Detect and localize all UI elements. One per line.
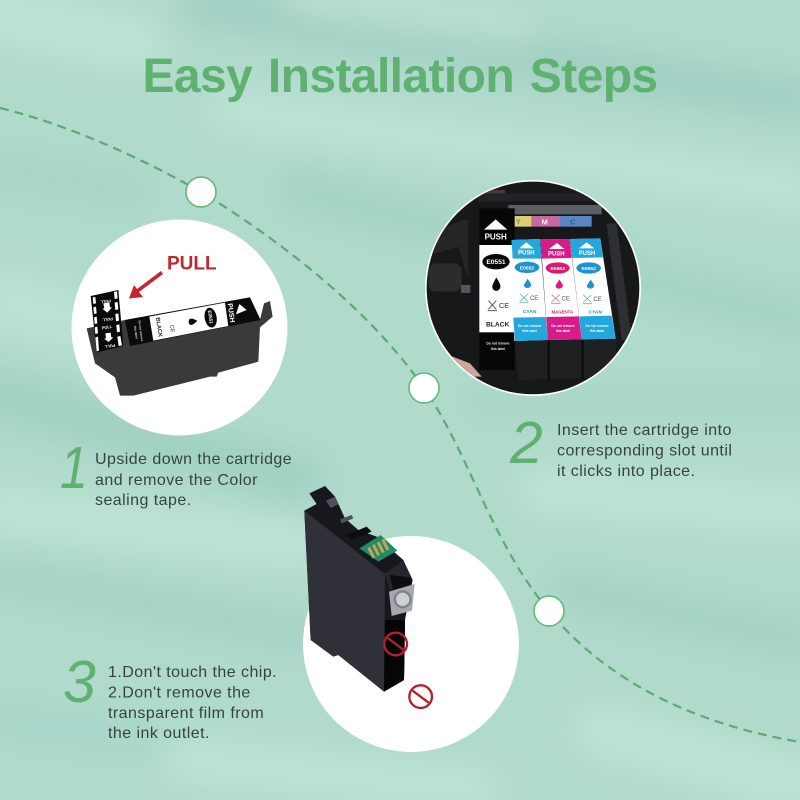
step 3 text: 1.Don't touch the chip.	[108, 664, 277, 681]
cartridge: pull tape: BLACK	[154, 317, 163, 338]
cartridge: pull tape: PULL	[100, 298, 111, 305]
cartridge: cyan right: this label	[590, 329, 604, 333]
cartridge: black: Do not remove	[486, 341, 510, 345]
cartridge: cyan right: CYAN	[588, 310, 603, 316]
cartridge: pull tape: this label	[133, 326, 139, 339]
cartridge: magenta: CE	[562, 297, 570, 303]
step 3 text: the ink outlet.	[108, 725, 210, 742]
cartridge: pull tape: PULL	[101, 324, 113, 330]
step 1 text: and remove the Color	[95, 472, 258, 489]
cartridge: black	[479, 208, 515, 370]
step 1 text: Upside down the cartridge	[95, 451, 292, 468]
dashed path	[0, 108, 800, 742]
prohibition icon: film	[409, 685, 432, 708]
cartridge: pull tape: Do not remove	[137, 320, 144, 342]
panel: step 1 photo	[72, 220, 288, 436]
cartridge: cyan: PUSH	[518, 251, 535, 257]
cartridge: pull tape: E0551	[207, 310, 214, 325]
cartridge: cyan right: Do not remove	[585, 324, 609, 328]
cartridge: magenta	[541, 239, 582, 340]
step 2 text	[557, 422, 732, 480]
arrow: pull	[129, 271, 163, 298]
step 1 number: 1	[60, 434, 88, 501]
panel: step 2 photo: Y	[516, 217, 521, 226]
cartridge: magenta: this label	[556, 329, 570, 333]
panel: step 2 photo	[425, 180, 641, 396]
cartridge: cyan right: E0552	[581, 266, 596, 272]
step 3 text: transparent film from	[108, 705, 264, 722]
ink outlet film	[389, 584, 415, 616]
cartridge: cyan right: CE	[593, 297, 602, 303]
cartridge: pull tape: CE	[168, 324, 175, 333]
node 2	[409, 373, 439, 403]
cartridge: magenta: MAGENTA	[552, 309, 574, 314]
cartridge: magenta: PUSH	[548, 251, 565, 257]
panel: step 2 photo: C	[570, 217, 576, 226]
cartridge: cyan right: PUSH	[579, 251, 595, 257]
step 3 text: 2.Don't remove the	[108, 684, 251, 702]
cartridge: cyan: Do not remove	[518, 324, 541, 328]
prohibition icon: chip	[384, 633, 407, 655]
cartridge: cyan: this label	[522, 329, 537, 333]
step 2 text: it clicks into place.	[557, 463, 695, 480]
step 1 text	[95, 451, 292, 509]
step 2 text: corresponding slot until	[557, 442, 732, 460]
cartridge: black: E0551	[486, 259, 506, 266]
step 3 text	[108, 664, 277, 742]
cartridge: cyan right	[570, 238, 616, 339]
panel: step 2 photo: M	[542, 217, 548, 226]
step 1 text: sealing tape.	[95, 492, 192, 509]
cartridge: cyan	[512, 239, 548, 341]
panel: step 3 photo	[303, 486, 519, 752]
cartridge: pull tape	[87, 290, 273, 396]
chip	[359, 535, 397, 562]
step 2 number: 2	[509, 410, 543, 476]
cartridge: cyan: CYAN	[523, 309, 537, 315]
cartridge: pull tape: PULL	[102, 316, 113, 323]
cartridge: black: PUSH	[485, 232, 507, 241]
cartridge: pull tape: PULL	[104, 343, 116, 349]
node 1	[186, 177, 216, 207]
step 2 text: Insert the cartridge into	[557, 422, 732, 439]
node 3	[534, 596, 564, 626]
step 3 number: 3	[63, 649, 96, 715]
cartridge: magenta: Do not remove	[551, 324, 575, 328]
cartridge: black: BLACK	[486, 322, 509, 329]
cartridge: side view	[304, 486, 432, 708]
label: pull: PULL	[167, 254, 217, 274]
cartridge: cyan: E0552	[520, 265, 534, 271]
cartridge: black: this label	[491, 347, 505, 351]
cartridge: cyan: CE	[530, 296, 538, 302]
cartridge: magenta: E0553	[550, 266, 565, 272]
cartridge: pull tape: PUSH	[226, 303, 235, 323]
title: Easy Installation Steps	[142, 50, 658, 103]
cartridge: black: CE	[499, 301, 509, 310]
